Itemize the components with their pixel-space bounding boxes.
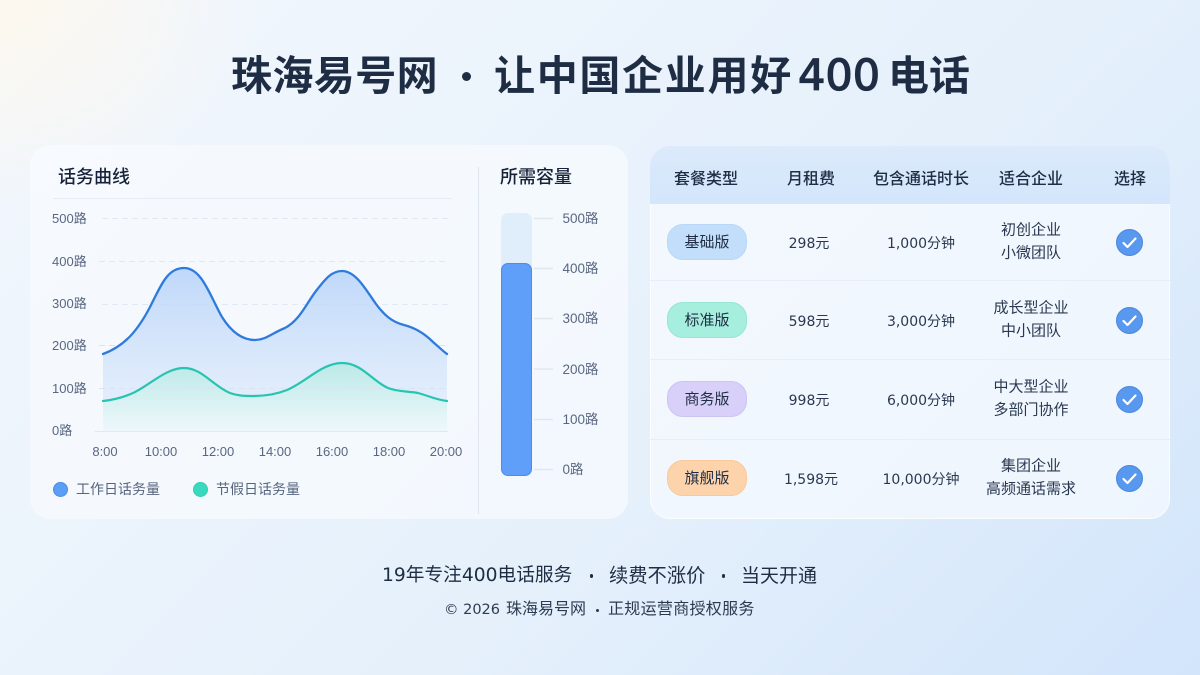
row: flagship plan: 集团企业 [1001,458,1061,474]
y axis labels: 100路 [52,381,87,396]
footer: copyright: 珠海易号网 [506,601,586,618]
x axis labels: 16:00 [316,444,348,459]
y axis labels [52,211,87,438]
row: basic plan: 初创企业 [1001,222,1061,238]
gauge ticks: 200路 [562,362,599,377]
row: flagship plan: 1,598元 [784,472,838,488]
footer: tagline [382,564,817,587]
y axis labels: 400路 [52,254,87,269]
row: business plan: 6,000分钟 [887,392,955,408]
pill: flagship [667,460,747,496]
pill: basic [667,224,747,260]
divider between chart and capacity [478,167,479,514]
title: 让中国企业用好 [494,53,793,99]
gauge ticks [534,212,599,477]
footer: copyright [444,600,755,618]
footer: tagline: 当天开通 [741,565,817,587]
pill: basic: 基础版 [684,234,730,251]
row: flagship plan: 高频通话需求 [986,480,1076,497]
row: flagship plan [667,458,1143,497]
row: standard plan: 598元 [789,314,829,330]
legend item: holiday: 节假日话务量 [216,481,300,497]
gauge ticks: 300路 [562,311,599,326]
icon: check [1116,386,1143,413]
row: basic plan [667,222,1143,261]
table header labels: 套餐类型 [674,171,738,188]
title: 珠海易号网 [231,53,438,99]
row: business plan: 多部门协作 [993,401,1069,418]
footer: copyright: 正规运营商授权服务 [608,601,755,618]
table header labels: 选择 [1114,171,1146,188]
title: 电话 [888,53,970,99]
heading: required capacity: 所需容量 [500,167,572,187]
capacity gauge [501,212,599,477]
row: business plan: 998元 [789,392,829,408]
row: standard plan: 中小团队 [1001,322,1061,339]
icon: check [1116,229,1143,256]
x axis labels [92,444,462,459]
pill: business: 商务版 [684,391,730,408]
gauge ticks: 400路 [562,261,599,276]
icon: check [1116,465,1143,492]
x axis labels: 8:00 [92,444,118,459]
row: standard plan [667,300,1143,339]
table header labels: 适合企业 [999,171,1063,188]
table header labels [674,170,1146,188]
table header band [650,146,1170,204]
row: business plan: 中大型企业 [993,378,1069,396]
holiday area [103,363,447,431]
row: business plan [667,378,1143,418]
panel: plans table [650,146,1170,519]
holiday line [103,363,447,401]
y axis labels: 0路 [52,423,72,438]
row: basic plan: 298元 [789,236,829,252]
pill: standard: 标准版 [684,312,730,329]
y axis labels: 300路 [52,296,87,311]
legend item: workday: 工作日话务量 [76,481,160,497]
gauge ticks: 100路 [562,412,599,427]
row: standard plan: 3,000分钟 [887,314,955,330]
y axis labels: 500路 [52,211,87,226]
workday area [103,268,447,431]
x axis labels: 10:00 [145,444,177,459]
heading: traffic curve: 话务曲线 [58,167,130,187]
panel: traffic curve and capacity [30,145,628,519]
row: flagship plan: 10,000分钟 [882,472,960,488]
icon: check [1116,307,1143,334]
table header labels: 月租费 [787,171,835,188]
title: 400 [798,51,880,101]
footer: copyright: © 2026 [444,602,500,618]
x axis labels: 12:00 [202,444,234,459]
x axis labels: 14:00 [259,444,291,459]
title [231,51,970,101]
row: standard plan: 成长型企业 [993,300,1069,316]
pill: standard [667,302,747,338]
gauge fill [501,263,532,476]
gauge track [501,213,532,476]
chart: traffic line chart [52,198,462,459]
workday line [103,268,447,354]
footer: tagline: 19年专注400电话服务 [382,565,572,586]
legend: workday and holiday [53,481,300,497]
table header labels: 包含通话时长 [873,171,969,188]
x axis labels: 20:00 [430,444,462,459]
gauge ticks: 0路 [562,462,584,477]
pill: business [667,381,747,417]
pill: flagship: 旗舰版 [684,470,730,487]
row: basic plan: 1,000分钟 [887,236,955,252]
row: basic plan: 小微团队 [1001,244,1061,261]
y axis labels: 200路 [52,338,87,353]
x axis labels: 18:00 [373,444,405,459]
footer: tagline: 续费不涨价 [609,564,705,587]
